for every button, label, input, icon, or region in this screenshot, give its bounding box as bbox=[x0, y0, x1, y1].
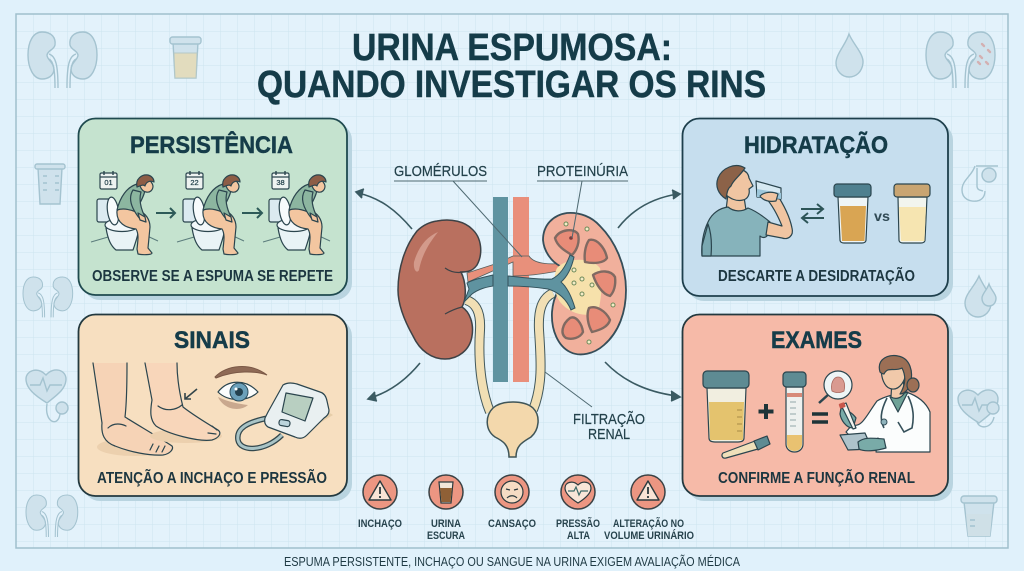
decorative icon: kidneys left middle bbox=[23, 277, 73, 317]
decorative icon: kidneys top left bbox=[28, 32, 97, 88]
label: cansaço: CANSAÇO bbox=[488, 518, 536, 530]
decorative icon: measuring cup left bbox=[35, 164, 65, 204]
decorative icon: heart with stethoscope right bbox=[958, 390, 999, 427]
title: QUANDO INVESTIGAR OS RINS bbox=[257, 64, 766, 106]
label: glomérulos: GLOMÉRULOS bbox=[394, 163, 487, 180]
arrow: to persistência bbox=[356, 189, 412, 229]
icon: alteração warning bbox=[631, 475, 665, 509]
illustration: blood pressure monitor bbox=[238, 383, 333, 448]
leader lines bbox=[453, 181, 592, 407]
illustration: swollen feet bbox=[93, 363, 222, 456]
icon: inchaço warning bbox=[363, 475, 397, 509]
icon: light urine cup bbox=[894, 184, 930, 243]
icon: urine sample cup bbox=[703, 371, 749, 442]
label: filtração renal: RENAL bbox=[588, 426, 630, 443]
caption: sinais: ATENÇÃO A INCHAÇO E PRESSÃO bbox=[97, 467, 327, 487]
icon: magnifier bbox=[819, 371, 852, 403]
arrow: to exames bbox=[605, 362, 680, 401]
caption: persistência: OBSERVE SE A ESPUMA SE REPETE bbox=[92, 268, 333, 285]
label: inchaço: INCHAÇO bbox=[358, 518, 402, 530]
arrow bbox=[156, 208, 175, 218]
icon: calendar day 38 bbox=[272, 171, 289, 189]
heading: exames: EXAMES bbox=[771, 327, 862, 354]
label: urina escura: ESCURA bbox=[427, 530, 465, 542]
illustration: doctor bbox=[838, 356, 930, 452]
label: urina escura: URINA bbox=[431, 518, 461, 530]
icon: calendar day 22: 22 bbox=[190, 178, 199, 187]
aorta bbox=[513, 197, 529, 382]
heading: sinais: SINAIS bbox=[174, 327, 250, 354]
icon: pressão alta heart bbox=[561, 475, 595, 509]
icon: calendar day 01: 01 bbox=[104, 178, 113, 187]
caption: exames: CONFIRME A FUNÇÃO RENAL bbox=[718, 467, 915, 487]
illustration: man drinking water bbox=[702, 166, 792, 256]
central urinary system illustration bbox=[398, 181, 626, 457]
icon: urina escura bbox=[429, 475, 463, 509]
label: alteração no volume urinário: VOLUME URINÁRIO bbox=[604, 529, 694, 542]
decorative icon: kidneys bottom left bbox=[26, 495, 78, 537]
panel: persistência bbox=[78, 118, 352, 300]
icon: test strip bbox=[722, 436, 770, 458]
icon: equals bbox=[812, 414, 828, 422]
label: filtração renal bbox=[573, 411, 645, 443]
decorative icon: drop top bbox=[836, 34, 863, 77]
decorative icon: drops right bbox=[965, 276, 996, 317]
arrow: to sinais bbox=[368, 363, 420, 401]
arrow: swelling pointer bbox=[185, 389, 197, 399]
caption: hidratação: DESCARTE A DESIDRATAÇÃO bbox=[718, 265, 915, 285]
label: alteração no volume urinário bbox=[604, 517, 694, 542]
label: pressão alta: PRESSÃO bbox=[556, 517, 600, 530]
label: proteinúria: PROTEINÚRIA bbox=[537, 163, 628, 180]
bladder bbox=[487, 402, 538, 457]
label: pressão alta bbox=[556, 517, 600, 542]
ureters bbox=[466, 293, 553, 412]
heading: persistência: PERSISTÊNCIA bbox=[130, 131, 293, 159]
dots: proteins bbox=[561, 222, 615, 344]
label: filtração renal: FILTRAÇÃO bbox=[573, 411, 645, 428]
renal arteries bbox=[467, 256, 566, 282]
panel: sinais bbox=[78, 314, 352, 501]
renal vein and vena cava bbox=[464, 197, 575, 382]
decorative icon: heart with stethoscope left bbox=[26, 370, 68, 422]
illustration: person on toilet day 38 bbox=[263, 175, 330, 255]
panel: hidratação bbox=[682, 118, 953, 301]
right kidney cross-section bbox=[543, 213, 626, 354]
decorative icon: urine cup top bbox=[170, 37, 201, 78]
illustration: puffy eye bbox=[215, 367, 267, 409]
icon: plus bbox=[758, 404, 774, 419]
label: pressão alta: ALTA bbox=[567, 530, 590, 542]
icon: calendar day 01 bbox=[100, 171, 117, 189]
icon: cansaço face bbox=[495, 475, 529, 509]
icon: dark urine cup bbox=[834, 184, 871, 243]
arrow bbox=[242, 208, 262, 218]
icon: blood test tube bbox=[783, 372, 806, 452]
label: alteração no volume urinário: ALTERAÇÃO NO bbox=[613, 517, 684, 530]
decorative icon: kidneys top right bbox=[926, 32, 995, 88]
icon: exchange arrows bbox=[801, 204, 824, 223]
label: urina escura bbox=[427, 518, 465, 542]
label: vs: vs bbox=[874, 208, 890, 224]
decorative icon: measuring cup right bbox=[961, 496, 997, 536]
arrow: to hidratação bbox=[618, 190, 680, 228]
title: URINA ESPUMOSA: bbox=[352, 27, 672, 69]
panel: exames bbox=[682, 314, 953, 501]
heading: hidratação: HIDRATAÇÃO bbox=[744, 131, 888, 159]
illustration: person on toilet day 22 bbox=[177, 175, 244, 255]
left kidney bbox=[398, 220, 481, 359]
icon: calendar day 38: 38 bbox=[276, 178, 285, 187]
decorative icon: flask right bbox=[962, 166, 998, 201]
illustration: person on toilet day 01 bbox=[91, 175, 158, 255]
footer warning: ESPUMA PERSISTENTE, INCHAÇO OU SANGUE NA URINA EXIGEM AVALIAÇÃO MÉDICA bbox=[284, 554, 740, 569]
renal pyramids bbox=[555, 230, 615, 339]
title bbox=[257, 27, 766, 106]
icon: calendar day 22 bbox=[186, 171, 203, 189]
